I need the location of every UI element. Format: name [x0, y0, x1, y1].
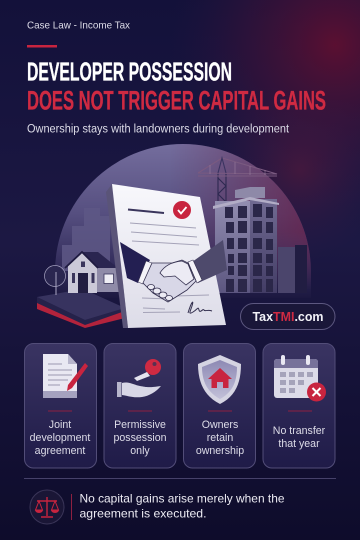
conclusion text: [80, 492, 285, 520]
handshake: [120, 240, 227, 302]
title: DEVELOPER POSSESSION: [27, 56, 232, 86]
card: joint development agreement: development: [30, 432, 90, 444]
icon: document and pen: [43, 354, 88, 398]
dome backdrop: [55, 144, 311, 298]
card: owners retain ownership: retain: [207, 432, 233, 444]
card: owners retain ownership: [184, 344, 256, 468]
building under construction: [213, 187, 279, 293]
icon: calendar with cross: [274, 355, 326, 402]
card: permissive possession only: only: [130, 445, 150, 457]
accent bar: [27, 45, 57, 48]
card: permissive possession only: [104, 344, 176, 468]
brand pill: TaxTMI.com: [252, 309, 324, 324]
card: joint development agreement: [24, 344, 96, 468]
contract document: [106, 184, 226, 328]
crane: [198, 158, 277, 240]
conclusion text: No capital gains arise merely when the: [80, 492, 285, 506]
card: joint development agreement: Joint: [49, 419, 71, 431]
card: no transfer that year: [263, 344, 335, 468]
card: joint development agreement: agreement: [35, 445, 85, 457]
card: owners retain ownership: ownership: [196, 445, 244, 457]
land plot: [37, 289, 125, 328]
card: no transfer that year: that year: [278, 438, 320, 450]
signature: [188, 302, 212, 313]
brand pill: [240, 304, 335, 330]
card: owners retain ownership: Owners: [202, 419, 238, 431]
eyebrow label: Case Law - Income Tax: [27, 20, 130, 32]
skyline left: [62, 208, 110, 271]
skyline right: [278, 245, 307, 293]
conclusion text: agreement is executed.: [80, 506, 206, 520]
tree: [44, 266, 66, 295]
house: [65, 252, 119, 293]
icon: scales of justice: [30, 490, 64, 524]
subtitle: Ownership stays with landowners during development: [27, 124, 290, 136]
icon: hand and key: [117, 359, 161, 397]
card: no transfer that year: No transfer: [273, 425, 326, 437]
card: permissive possession only: Permissive: [114, 419, 166, 431]
title: [27, 56, 326, 116]
card: permissive possession only: possession: [114, 432, 167, 444]
red check seal: [173, 201, 191, 219]
icon: shield with house: [198, 355, 241, 404]
hero illustration: [37, 144, 311, 328]
